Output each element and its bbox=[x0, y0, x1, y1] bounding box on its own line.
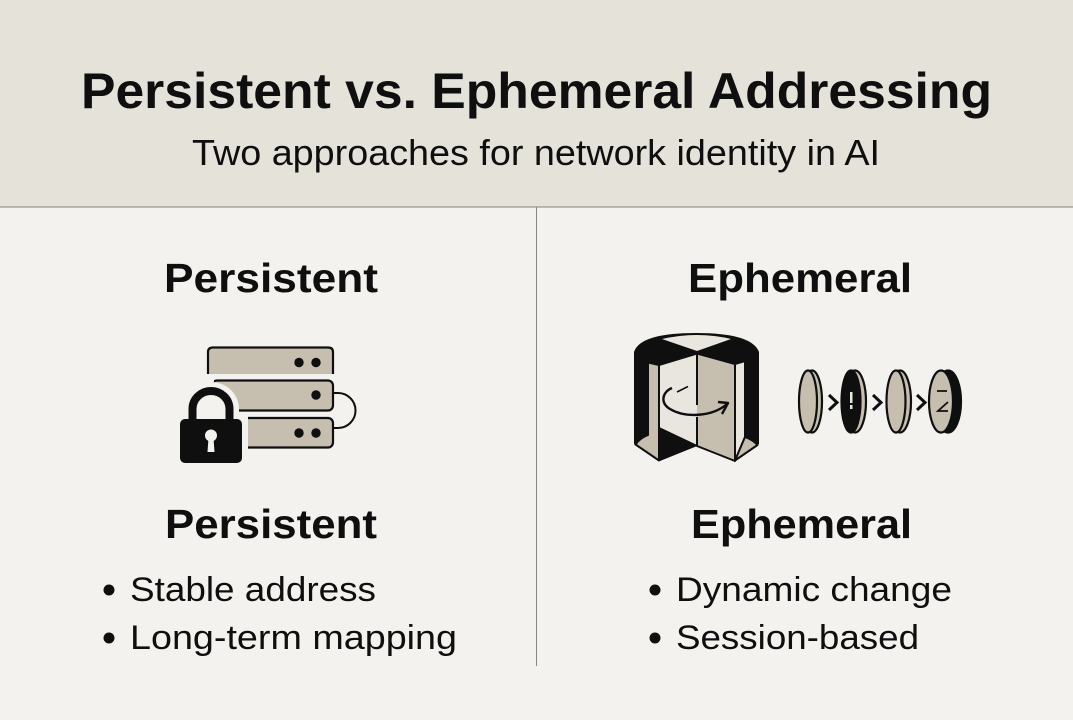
icon: sequence of discs with arrows bbox=[799, 370, 961, 432]
arrow 1 bbox=[829, 395, 837, 410]
bullet list: persistent bbox=[104, 571, 457, 657]
disc 1 bbox=[799, 370, 822, 432]
arrow 3 bbox=[917, 395, 925, 410]
bullet list: ephemeral bbox=[650, 571, 952, 657]
subtitle: Two approaches for network identity in AI bbox=[192, 132, 880, 173]
heading: persistent lower: Persistent bbox=[165, 501, 377, 547]
bullet list: ephemeral: Session-based bbox=[676, 619, 919, 657]
bullet list: persistent: Long-term mapping bbox=[130, 619, 457, 657]
arrow 2 bbox=[873, 395, 881, 410]
disc 4 bbox=[929, 370, 961, 432]
bullet list: persistent: Stable address bbox=[130, 571, 376, 609]
bullet list: ephemeral: Dynamic change bbox=[676, 571, 952, 609]
icon: rotating cylinder bbox=[634, 333, 759, 461]
title: Persistent vs. Ephemeral Addressing bbox=[81, 63, 992, 119]
disc 2 bbox=[842, 370, 866, 432]
icon: server rack with padlock bbox=[172, 347, 356, 470]
heading: persistent top: Persistent bbox=[164, 255, 378, 301]
heading: ephemeral lower: Ephemeral bbox=[691, 501, 912, 547]
disc 3 bbox=[886, 370, 911, 432]
heading: ephemeral top: Ephemeral bbox=[688, 255, 912, 301]
panel: ephemeral bbox=[634, 255, 961, 657]
panel: persistent bbox=[104, 255, 457, 657]
column divider bbox=[536, 207, 537, 666]
header band bbox=[0, 0, 1073, 208]
